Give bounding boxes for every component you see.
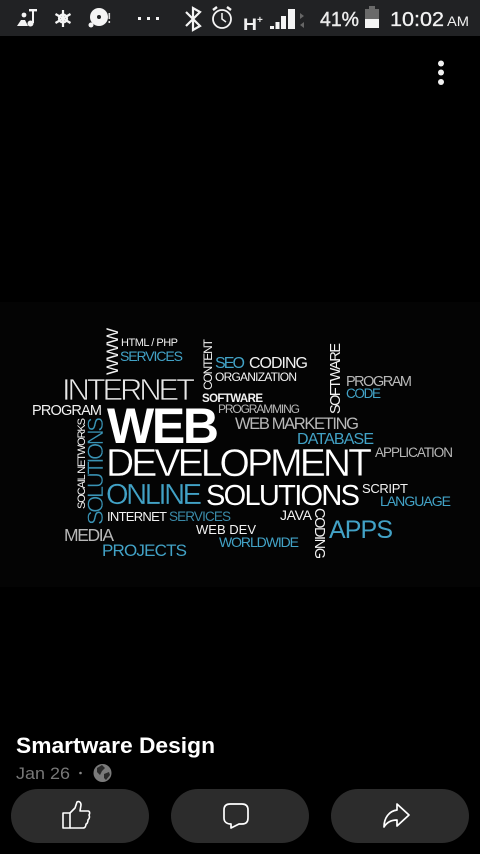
clock period: AM <box>447 14 469 29</box>
word: SEO: SEO <box>215 355 245 372</box>
word: SERVICES small: SERVICES <box>169 509 231 524</box>
icon: share arrow <box>384 804 409 827</box>
word: WEB DEV: WEB DEV <box>196 522 256 537</box>
word: MEDIA: MEDIA <box>64 525 114 545</box>
word: SOCAIL NETWORKS: SOCAIL NETWORKS <box>76 418 88 509</box>
icon: bluetooth <box>186 8 200 30</box>
word: SERVICES: SERVICES <box>120 348 183 364</box>
icon: disc alert <box>88 8 110 28</box>
word: CONTENT: CONTENT <box>201 338 215 390</box>
icon: more notifications <box>138 17 159 20</box>
separator dot <box>79 772 82 774</box>
word: SOFTWARE vertical: SOFTWARE <box>328 343 344 414</box>
word: WORLDWIDE: WORLDWIDE <box>219 534 299 550</box>
word: ORGANIZATION: ORGANIZATION <box>215 370 297 384</box>
word: ONLINE: ONLINE <box>106 479 202 511</box>
icon: battery <box>365 6 379 28</box>
word: PROGRAM right: PROGRAM <box>346 374 412 390</box>
word: SOLUTIONS: SOLUTIONS <box>206 480 360 512</box>
icon: snowflake <box>56 10 70 27</box>
icon: speech bubble <box>224 804 248 828</box>
word: INTERNET small: INTERNET <box>107 509 167 524</box>
button: share <box>331 789 469 843</box>
icon: thumbs up <box>63 802 90 828</box>
word: HTML / PHP: HTML / PHP <box>121 337 178 349</box>
word: APPLICATION: APPLICATION <box>375 445 453 460</box>
word: PROGRAMMING: PROGRAMMING <box>218 402 300 416</box>
button: comment <box>171 789 309 843</box>
word: WWW: WWW <box>103 328 122 375</box>
battery percent: 41% <box>320 9 359 31</box>
post author: Smartware Design <box>16 733 215 758</box>
word: INTERNET large: INTERNET <box>62 372 195 407</box>
word: LANGUAGE: LANGUAGE <box>380 493 451 509</box>
word: CODING: CODING <box>249 355 308 372</box>
icon: data arrows <box>300 13 304 28</box>
clock: 10:02 <box>390 8 444 31</box>
post date: Jan 26 <box>16 764 70 783</box>
icon: signal bars <box>270 9 295 29</box>
button: like <box>11 789 149 843</box>
icon: overflow menu <box>438 60 444 85</box>
word: PROGRAM left: PROGRAM <box>32 403 102 419</box>
word: CODING vertical: CODING <box>311 508 327 559</box>
word: SOFTWARE horizontal: SOFTWARE <box>202 393 263 405</box>
word: CODE: CODE <box>346 386 381 401</box>
network plus: + <box>257 15 263 26</box>
word: DATABASE: DATABASE <box>297 431 374 448</box>
status bar <box>0 0 480 36</box>
word: PROJECTS: PROJECTS <box>102 541 187 560</box>
icon: music notification <box>17 9 37 26</box>
word: WEB MARKETING: WEB MARKETING <box>235 415 359 433</box>
word: SOLUTIONS vertical: SOLUTIONS <box>83 417 108 525</box>
word: SCRIPT: SCRIPT <box>362 481 408 496</box>
word: JAVA: JAVA <box>280 507 313 523</box>
word: WEB: WEB <box>107 398 219 454</box>
network type: H <box>243 15 257 34</box>
word: DEVELOPMENT: DEVELOPMENT <box>106 442 372 485</box>
icon: globe <box>94 764 112 782</box>
word cloud image <box>0 302 480 587</box>
icon: alarm clock <box>213 7 231 28</box>
word: APPS: APPS <box>329 516 393 544</box>
